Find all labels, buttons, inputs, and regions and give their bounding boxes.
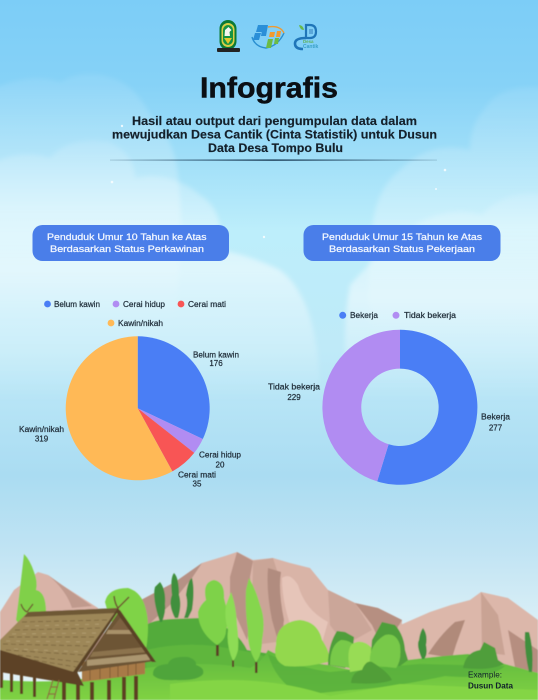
bushes and trees [16,554,533,684]
subtitle: Hasil atau output dari pengumpulan data dalam [132,115,417,128]
heading pill: marital status: Berdasarkan Status Perkawinan [50,243,204,254]
title: Infografis [200,72,338,104]
subtitle: Data Desa Tompo Bulu [208,142,343,155]
donut labels: 229 [287,393,301,402]
hill: left green [140,618,277,700]
mountains [0,552,538,680]
logo: Desa Cantik: Cantik [303,44,318,50]
legend: marital status: Cerai hidup [123,300,166,309]
bush: light round small [348,642,376,672]
donut labels: Tidak bekerja [268,382,321,392]
donut labels: Bekerja [481,412,511,422]
slice: Belum kawin [138,336,210,439]
pie labels: Cerai hidup [199,450,242,460]
ground: main grass [0,650,538,700]
pie labels: 176 [209,359,223,368]
legend: employment status: Bekerja [350,311,379,320]
legend: employment status: Tidak bekerja [404,311,457,320]
legend: marital status: Belum kawin [54,300,100,309]
bush group center [328,631,354,668]
mountain: center [141,552,402,670]
cypress trio [154,582,165,622]
heading pill: employment status: Penduduk Umur 15 Tahun ke Atas [322,231,482,242]
tree: round center [216,645,219,656]
house: wooden wall [82,655,145,682]
house: stilts [0,668,138,700]
donut labels [268,382,511,432]
sparkles [111,125,446,238]
heading pill: marital status: Penduduk Umur 10 Tahun ke Atas [47,231,207,242]
divider [110,160,437,161]
tree: tall left [16,554,46,625]
house: under-floor structure [0,646,84,686]
house: roof horns [114,596,129,608]
bush: dark green center [153,657,203,680]
clouds [0,74,538,400]
slice: Kawin/nikah [66,336,172,480]
slice: Cerai mati [138,408,194,471]
legend: employment status [339,311,457,320]
donut chart: employment status [322,330,477,485]
pie labels [19,350,242,488]
subtitle [112,115,437,155]
house: roof edge [73,608,156,673]
heading pill: employment status [304,225,500,261]
ground [0,618,538,700]
slice: Bekerja [377,330,477,485]
house [0,596,156,700]
logo: regency crest [217,20,240,52]
bush: dark small foreground [351,662,392,684]
landscape illustration [0,552,538,700]
mountain: right [398,592,538,680]
heading pill: marital status [32,225,229,261]
bush: dark right [463,642,504,669]
logo: Desa Cantik [295,25,318,50]
house: gable [78,610,155,672]
house: ladder [47,680,59,699]
pie labels: Kawin/nikah [19,425,64,434]
pie labels: Cerai mati [178,470,216,480]
legend: marital status [44,300,226,328]
pie chart: marital status [66,336,210,480]
bush: large right [370,622,408,666]
mountain: far left [0,572,110,660]
donut labels: 277 [489,424,503,432]
bush: light green right [275,620,329,666]
pie labels: 20 [216,460,225,470]
logos [217,20,318,52]
tree: round bush behind house [105,588,148,650]
pie labels: Belum kawin [193,350,239,360]
tree: slender right [255,662,258,673]
legend: marital status: Cerai mati [188,300,226,309]
footer note [468,670,513,690]
slice: Tidak bekerja [322,330,400,481]
footer note: Example: [468,670,502,680]
house: thatched roof [0,608,119,672]
tree: slender center [232,660,234,667]
logo: Desa Cantik: Desa [303,39,314,44]
legend: marital status: Kawin/nikah [118,319,163,328]
pie labels: 35 [193,480,202,488]
cypress right [418,628,427,659]
slice: Cerai hidup [138,408,203,453]
heading pill: employment status: Berdasarkan Status Pekerjaan [329,243,475,254]
logo: BPS [252,25,284,48]
footer note: Dusun Data [468,680,513,690]
subtitle: mewujudkan Desa Cantik (Cinta Statistik) untuk Dusun [112,128,437,142]
pie labels: 319 [35,434,49,444]
